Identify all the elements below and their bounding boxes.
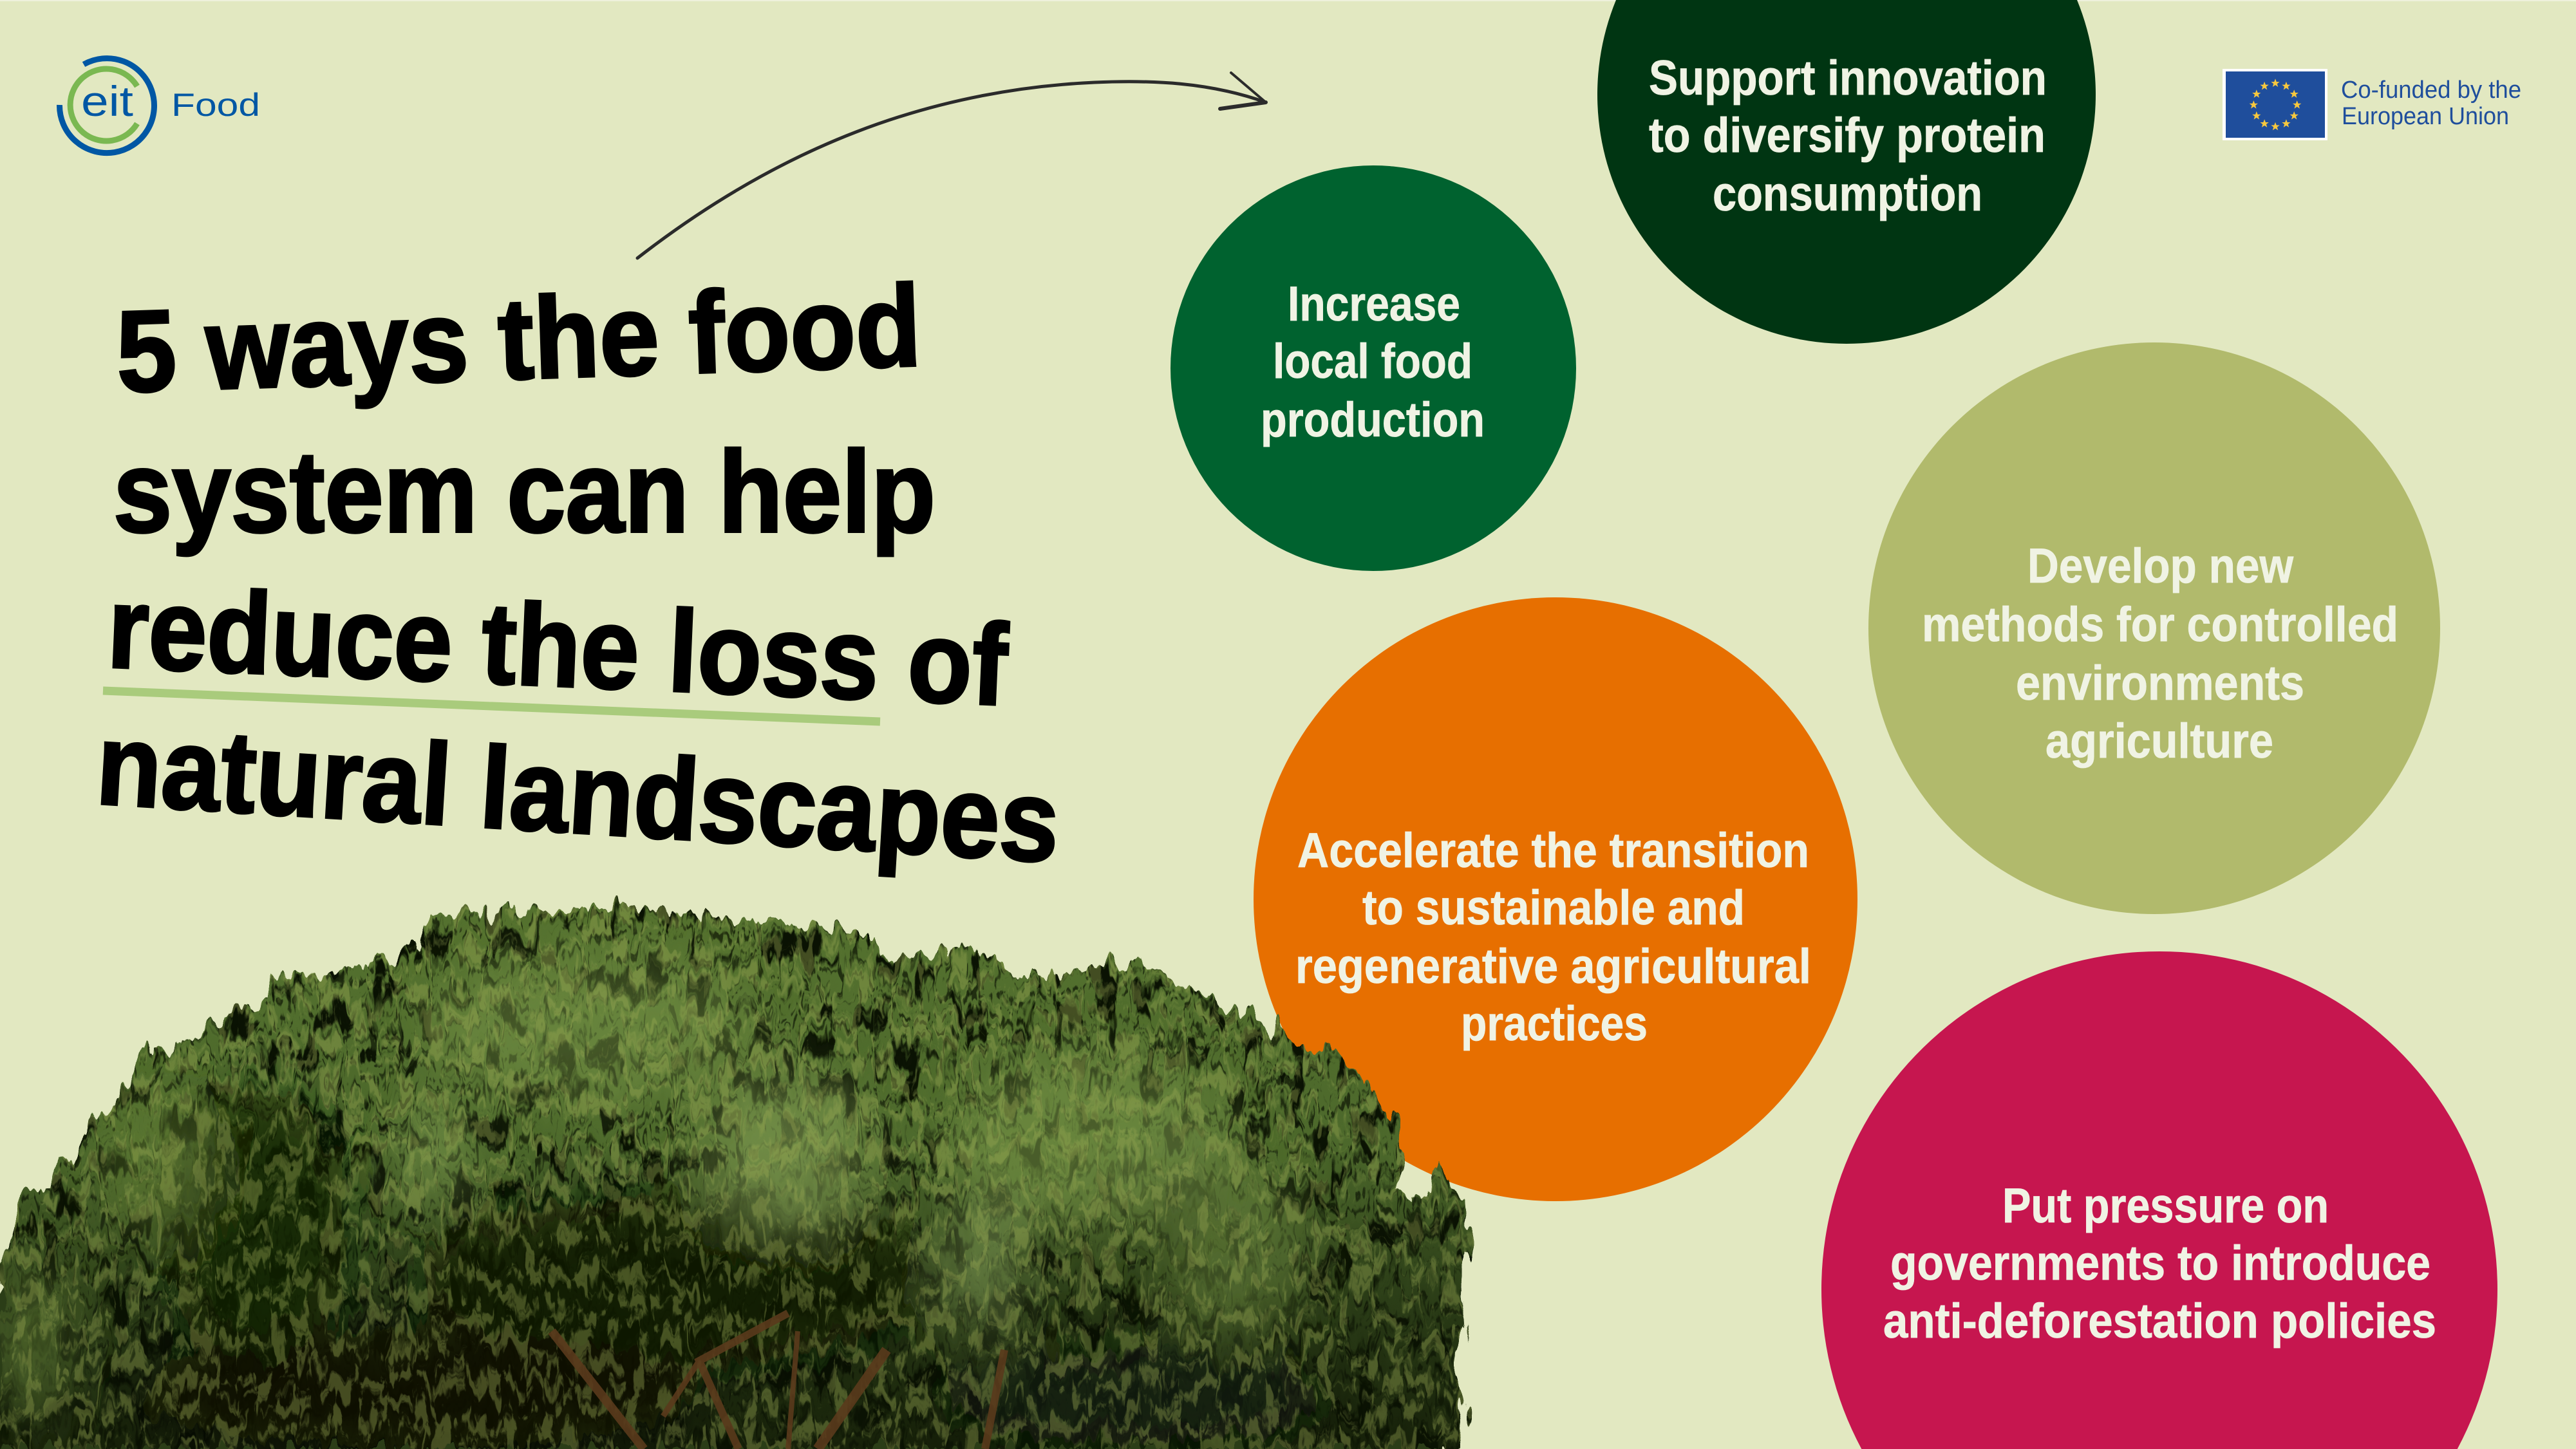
co-funded caption	[2341, 77, 2521, 130]
circle: accelerate the transition: regenerative agricultural	[1295, 939, 1811, 994]
circle: put pressure on governments: governments to introduce	[1890, 1236, 2430, 1291]
circle: accelerate the transition: Accelerate the transition	[1297, 823, 1809, 878]
title	[93, 261, 1063, 887]
circle: increase local food production	[1170, 165, 1576, 571]
circle: develop new methods for controlled environments agriculture: Develop new	[2027, 539, 2294, 594]
co-funded caption: Co-funded by the	[2341, 77, 2521, 104]
title: 5 ways the food	[115, 261, 923, 417]
circle: develop new methods for controlled environments agriculture: methods for controlled	[1922, 597, 2398, 652]
circle: accelerate the transition: to sustainable and	[1362, 881, 1745, 935]
circle: develop new methods for controlled environments agriculture: environments	[2016, 656, 2304, 711]
circle: support innovation to diversify protein consumption	[1597, 0, 2096, 344]
title underline highlight	[103, 691, 880, 722]
circle: increase local food production: Increase	[1288, 277, 1460, 332]
title: natural landscapes	[93, 699, 1063, 887]
arrow: curved arrow toward circles	[637, 73, 1266, 258]
circle: increase local food production: local food	[1273, 334, 1472, 389]
EU flag	[2223, 69, 2327, 140]
illustration: pine tree crown	[0, 863, 1507, 1449]
co-funded caption: European Union	[2342, 103, 2509, 130]
circle: accelerate the transition: practices	[1461, 996, 1648, 1051]
circle: develop new methods for controlled environments agriculture	[1868, 342, 2440, 914]
circle: increase local food production: production	[1261, 393, 1485, 447]
title: reduce the loss of	[105, 563, 1011, 730]
logo: EIT Food: eit	[81, 77, 133, 125]
circle: put pressure on governments	[1821, 951, 2497, 1449]
circle: put pressure on governments: Put pressure on	[2002, 1179, 2329, 1233]
circle: support innovation to diversify protein consumption: consumption	[1713, 167, 1982, 221]
logo: EIT Food: Food	[171, 87, 260, 123]
circle: develop new methods for controlled environments agriculture: agriculture	[2045, 714, 2273, 769]
circle: support innovation to diversify protein consumption: Support innovation	[1649, 51, 2047, 106]
circle: support innovation to diversify protein consumption: to diversify protein	[1649, 108, 2045, 163]
circle: accelerate the transition	[1254, 597, 1857, 1201]
logo: EIT Food	[59, 59, 260, 153]
circle: put pressure on governments: anti-deforestation policies	[1883, 1294, 2436, 1349]
title: system can help	[113, 427, 935, 557]
